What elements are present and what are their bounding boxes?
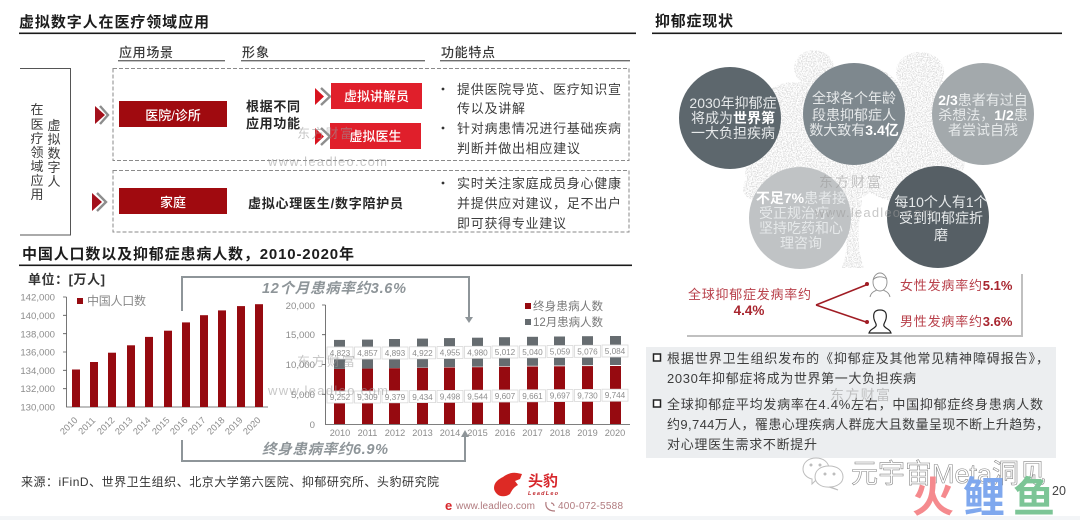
circle: under 7% treated: [749, 167, 851, 269]
data labels: lifetime patients: 9,697: [550, 392, 571, 400]
bar chart: population: 136,000: [20, 348, 55, 358]
text: by application: 根据不同: [246, 99, 300, 114]
callout: prevalence: 男性发病率约3.6%: [900, 314, 1013, 329]
watermarks: 东方财富: [819, 174, 881, 190]
watermark: huoliyu logo: 鲤: [963, 474, 1005, 520]
arrow: lifetime bracket: 终身患病率约6.9%: [262, 441, 388, 458]
heading: population and depression: 中国人口数以及抑郁症患病人数，2010-2020年: [22, 245, 354, 263]
watermarks: [267, 126, 933, 403]
circle: 1 in 10: 磨: [934, 227, 948, 243]
callout: prevalence: 全球抑郁症发病率约: [688, 287, 811, 302]
side bracket label: 拟: [47, 132, 61, 147]
data labels: 12-month patients: 4,857: [357, 349, 378, 358]
data labels: lifetime patients: 9,607: [495, 392, 516, 401]
stacked bar chart: patients: 2014: [440, 428, 460, 438]
data labels: 12-month patients: 5,012: [495, 348, 516, 357]
side bracket label: 疗: [30, 131, 44, 146]
feature list: hospital: 针对病患情况进行基础疾病: [457, 121, 621, 136]
data labels: 12-month patients: 4,980: [467, 348, 488, 358]
column headers: 功能特点: [441, 45, 495, 60]
stacked bar chart: patients: 2015: [467, 428, 488, 438]
label: hospital/clinic: 医院/诊所: [145, 108, 201, 123]
side bracket label: [20, 68, 70, 235]
bullet: prevalence in China: 约9,744万人，罹患心理疾病人群庞大且数量呈现不断上升趋势，: [667, 417, 1049, 432]
data labels: lifetime patients: 9,744: [605, 391, 626, 400]
side bracket label: 在: [30, 102, 44, 117]
text: virtual counsellor: 虚拟心理医生/数字陪护员: [248, 196, 403, 211]
side bracket label: 虚: [47, 118, 61, 133]
circle: under 7% treated: 不足7%患者接: [756, 190, 846, 206]
bar chart: population: 140,000: [20, 311, 55, 322]
logo: LeadLeo: [445, 473, 623, 513]
side bracket label: 人: [47, 174, 61, 189]
circle: 340 million patients: 段患抑郁症人: [812, 107, 896, 123]
label: hospital/clinic: [119, 101, 227, 127]
watermarks: www.leadleo.com: [814, 205, 933, 220]
side bracket label: 字: [47, 160, 61, 175]
heading: depression status: 抑郁症现状: [655, 12, 733, 30]
stacked bar chart: patients: 0: [310, 420, 315, 431]
data labels: 12-month patients: 5,059: [550, 348, 571, 356]
circle: 340 million patients: 全球各个年龄: [812, 90, 896, 106]
arrow: to virtual explainer: [315, 88, 330, 105]
circle: 1 in 10: 受到抑郁症折: [899, 210, 983, 226]
bar chart: population: 2018: [205, 415, 227, 437]
source note: 来源：iFinD、世界卫生组织、北京大学第六医院、抑郁研究所、头豹研究院: [21, 474, 439, 489]
stacked bar chart: patients: 2020: [605, 428, 625, 438]
legend: population: 中国人口数: [87, 293, 146, 308]
panel: home scenario: [92, 170, 629, 232]
arrow: home: [92, 193, 106, 211]
arrow: hospital: [95, 106, 108, 124]
data labels: lifetime patients: 9,252: [330, 393, 351, 402]
column headers: 应用场景: [119, 45, 173, 60]
data labels: 12-month patients: 5,076: [577, 348, 598, 356]
arrows: split by gender: [816, 282, 869, 324]
circle: 1 in 10: 每10个人有1个: [894, 194, 988, 210]
watermark: huoliyu logo: 鱼: [1013, 474, 1055, 520]
watermarks: www.leadleo.com: [267, 154, 387, 169]
data labels: lifetime patients: 9,379: [385, 393, 406, 402]
callout: prevalence: [685, 272, 1023, 337]
stacked bar chart: patients: 2017: [522, 428, 543, 438]
label: virtual doctor: 虚拟医生: [349, 129, 402, 144]
callout: prevalence: 4.4%: [734, 303, 764, 318]
circle: under 7% treated: 受正规治疗，: [759, 205, 843, 221]
side bracket label: 领: [30, 145, 44, 160]
watermarks: www.leadleo.com: [267, 383, 388, 398]
data labels: 12-month patients: [327, 345, 628, 359]
data labels: 12-month patients: 4,922: [412, 349, 433, 358]
arrow: 12-month bracket: 12个月患病率约3.6%: [262, 280, 406, 297]
data labels: lifetime patients: 9,661: [522, 392, 543, 401]
label: virtual explainer: 虚拟讲解员: [344, 89, 409, 104]
legend: patients: [525, 299, 604, 329]
watermarks: 东方财富: [830, 387, 890, 403]
footer strip: [0, 516, 1080, 520]
feature list: home: 并提供应对建议，足不出户: [457, 196, 621, 211]
bullet: prevalence in China: [654, 397, 1049, 452]
bar chart: population: 2011: [76, 415, 97, 436]
stacked bar chart: patients: 2011: [358, 428, 377, 438]
bar chart: population: 142,000: [20, 292, 55, 304]
panel: key takeaways: [646, 347, 1056, 458]
bullet: prevalence in China: 全球抑郁症平均发病率在4.4%左右，中国抑郁症终身患病人数: [667, 397, 1043, 412]
logo: LeadLeo: e: [445, 498, 452, 513]
stacked bar chart: patients: 15,000: [286, 330, 315, 341]
stacked bar chart: patients: 2019: [577, 428, 598, 438]
stacked bar chart: patients: [286, 299, 630, 438]
logo: LeadLeo: LeadLeo: [528, 491, 559, 497]
circle: world's top disease: 将成为世界第: [691, 110, 775, 126]
side bracket label: 域: [30, 159, 44, 174]
arrow: lifetime bracket: [182, 430, 469, 461]
page number: 20: [1052, 484, 1066, 498]
bar chart: population: 138,000: [20, 330, 55, 340]
data labels: 12-month patients: 4,893: [385, 349, 406, 358]
bar chart: population: 2012: [95, 415, 117, 437]
data labels: 12-month patients: 5,040: [522, 348, 543, 357]
circle: suicidal thoughts: 杀想法，1/2患: [938, 107, 1028, 123]
logo: LeadLeo: www.leadleo.com: [455, 501, 535, 512]
bar chart: population: 2019: [223, 415, 245, 437]
circle: 340 million patients: 数大致有3.4亿: [809, 122, 899, 138]
bar chart: population: 2013: [113, 415, 135, 437]
bar chart: population: 2017: [186, 415, 208, 437]
column headers: [118, 45, 630, 61]
watermarks: 东方财富: [297, 354, 355, 369]
feature list: hospital: [442, 82, 621, 156]
bar chart: population: 2020: [241, 415, 263, 437]
watermark: WeChat channel: 元宇宙Meta洞见: [851, 459, 1046, 489]
watermark: huoliyu logo: 火: [912, 474, 954, 520]
side bracket label: 应: [30, 173, 44, 188]
circle: under 7% treated: 坚持吃药和心: [759, 220, 843, 236]
stacked bar chart: patients: 2010: [330, 428, 350, 438]
data labels: lifetime patients: 9,434: [412, 393, 433, 402]
bullet: prevalence in China: 对心理医生需求不断提升: [667, 437, 817, 452]
legend: patients: 终身患病人数: [533, 299, 604, 313]
text: by application: 应用功能: [246, 116, 300, 131]
legend: patients: 12月患病人数: [533, 315, 604, 329]
watermarks: 东方财富: [297, 126, 353, 141]
bar chart: population: 2010: [58, 415, 80, 437]
watermark: huoliyu logo: [912, 474, 1055, 520]
bar chart: population: 134,000: [20, 366, 55, 377]
bullet: WHO report: 2030年抑郁症将成为世界第一大负担疾病: [667, 371, 916, 386]
data labels: lifetime patients: 9,544: [467, 392, 488, 402]
stacked bar chart: patients: 20,000: [286, 301, 315, 312]
bar chart: population: 2015: [150, 415, 172, 437]
circle: under 7% treated: 理咨询: [780, 235, 822, 251]
circle: 340 million patients: [803, 63, 905, 165]
bar chart: population: 132,000: [20, 384, 55, 395]
circle: world's top disease: 一大负担疾病: [691, 125, 775, 141]
data labels: 12-month patients: 4,955: [440, 348, 461, 358]
circle: world's top disease: [679, 67, 781, 169]
data labels: 12-month patients: 4,823: [330, 349, 351, 358]
feature list: hospital: 传以及讲解: [457, 101, 525, 116]
circle: 1 in 10: [887, 166, 989, 268]
text: by application: [246, 99, 300, 131]
circle: suicidal thoughts: 2/3患者有过自: [938, 92, 1028, 108]
stacked bar chart: patients: 2018: [550, 428, 570, 438]
feature list: hospital: 判断并做出相应建议: [457, 141, 580, 156]
bar chart: population: [20, 292, 268, 437]
logo: LeadLeo: 400-072-5588: [558, 501, 623, 512]
data labels: lifetime patients: 9,498: [440, 392, 461, 402]
label: virtual doctor: [330, 123, 421, 149]
bullet: WHO report: 根据世界卫生组织发布的《抑郁症及其他常见精神障碍报告》，: [667, 351, 1049, 366]
stacked bar chart: patients: 10,000: [286, 360, 315, 371]
label: home: 家庭: [160, 195, 186, 210]
bullet: WHO report: [654, 351, 1049, 386]
arrow: 12-month bracket: [182, 277, 473, 323]
circle: suicidal thoughts: [932, 63, 1034, 165]
stacked bar chart: patients: 2012: [385, 428, 405, 438]
callout: prevalence: 女性发病率约5.1%: [900, 278, 1013, 293]
bar chart: population: 130,000: [20, 402, 55, 414]
label: virtual explainer: [331, 83, 422, 109]
stacked bar chart: patients: 2016: [495, 428, 515, 438]
icon: female: [870, 273, 890, 297]
panel: hospital scenario: [95, 68, 629, 160]
feature list: home: [442, 176, 621, 231]
circle: world's top disease: 2030年抑郁症: [689, 95, 777, 111]
stacked bar chart: patients: 5,000: [291, 390, 315, 401]
bar chart: population: 2014: [131, 415, 153, 437]
bar chart: population: 2016: [168, 415, 190, 437]
unit label: 单位：[万人]: [28, 272, 105, 287]
data labels: lifetime patients: 9,730: [577, 392, 598, 400]
side bracket label: 数: [47, 146, 61, 161]
feature list: home: 实时关注家庭成员身心健康: [457, 176, 621, 191]
data labels: 12-month patients: 5,084: [605, 347, 626, 356]
feature list: home: 即可获得专业建议: [457, 216, 566, 231]
side bracket label: 医: [30, 117, 44, 132]
arrow: to virtual doctor: [315, 128, 330, 145]
circle: suicidal thoughts: 者尝试自残: [948, 122, 1018, 138]
stacked bar chart: patients: 2013: [412, 428, 433, 438]
side bracket label: 用: [30, 187, 44, 202]
data labels: lifetime patients: 9,309: [357, 393, 378, 402]
label: home: [119, 188, 227, 214]
data labels: lifetime patients: [327, 389, 628, 403]
column headers: 形象: [242, 45, 269, 60]
icon: male: [869, 310, 891, 333]
heading: digital human in healthcare: 虚拟数字人在医疗领域应用: [19, 13, 209, 31]
tree illustration: [743, 50, 965, 268]
feature list: hospital: 提供医院导览、医疗知识宣: [457, 82, 621, 97]
logo: LeadLeo: 头豹: [528, 473, 558, 490]
